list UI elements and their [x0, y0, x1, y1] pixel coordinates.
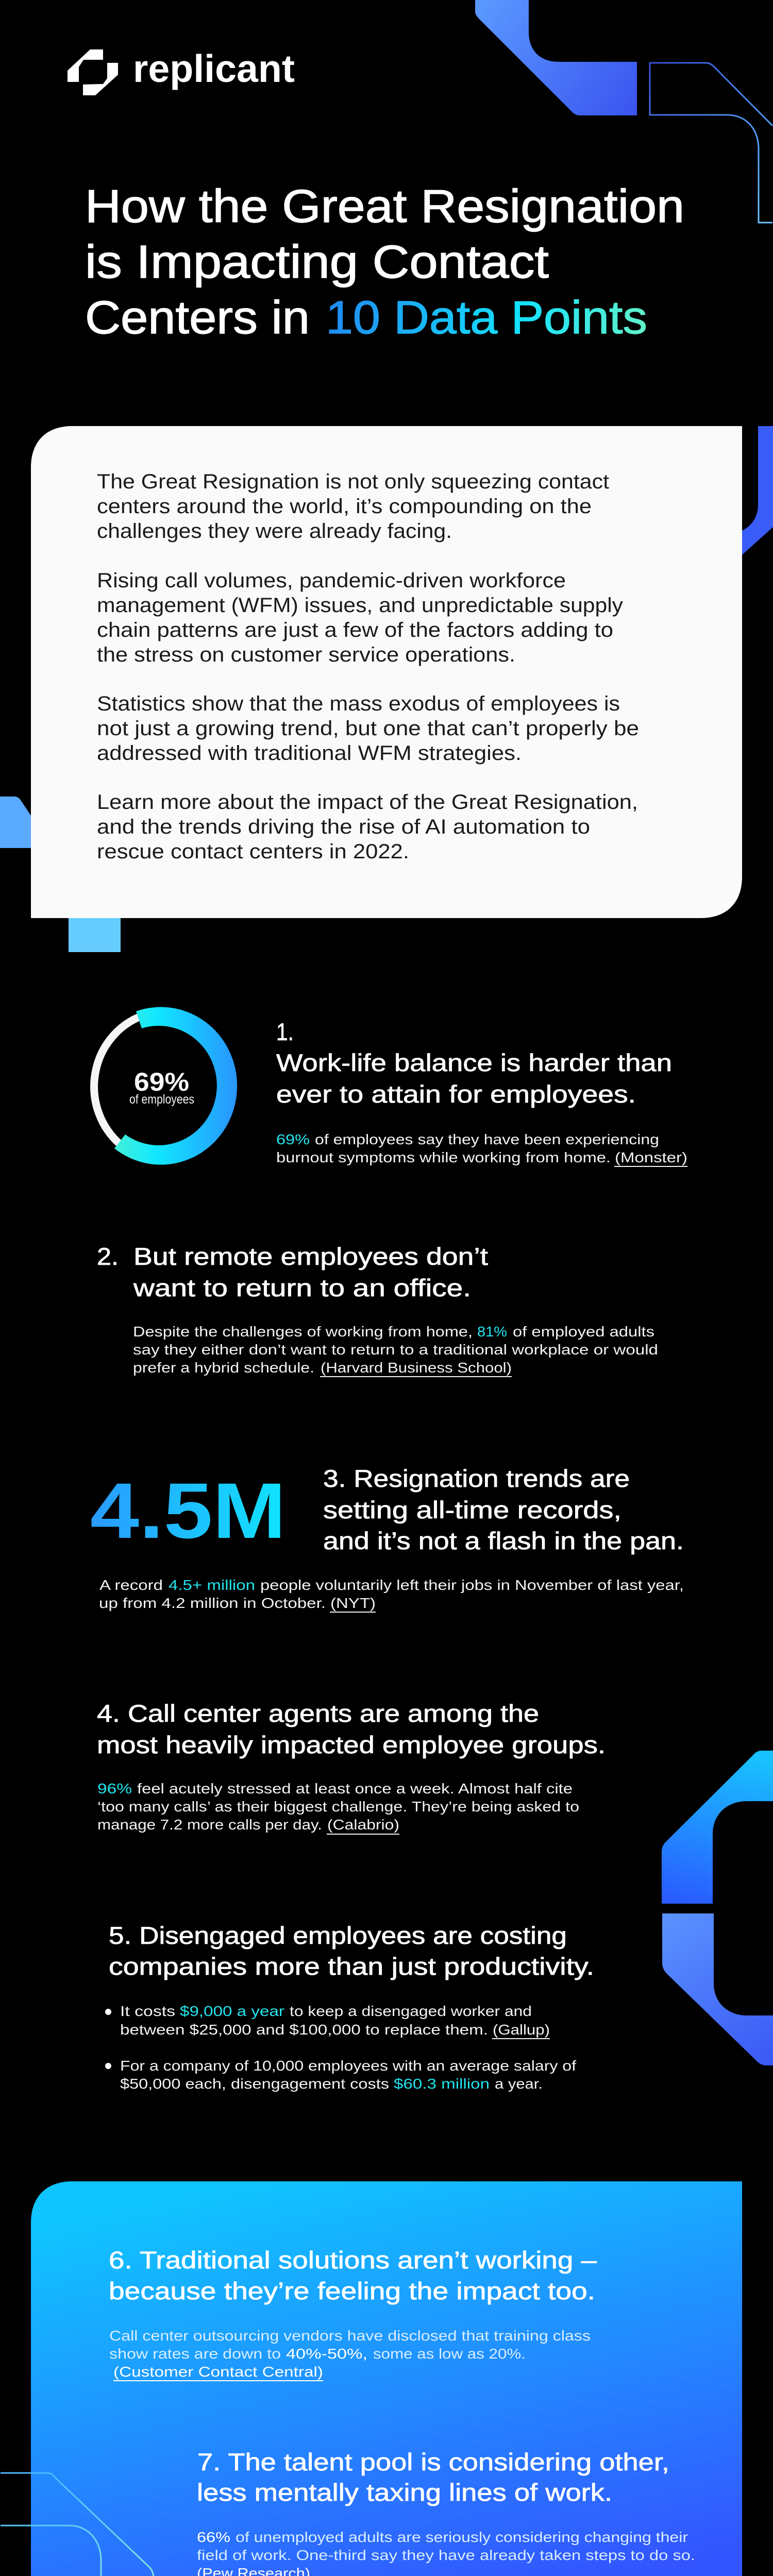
point 5: disengaged employees: $50,000 each, disengagement costs	[120, 2076, 389, 2092]
point 1: work-life balance: ever to attain for employees.	[276, 1080, 636, 1108]
point 5: disengaged employees: (Gallup)	[493, 2022, 550, 2038]
point 5: disengaged employees: 5. Disengaged employees are costing	[109, 1922, 567, 1949]
point 7: talent pool: field of work. One-third say they have already taken steps to do so.	[197, 2547, 695, 2563]
point 1: work-life balance: (Monster)	[615, 1149, 687, 1165]
title: 10 Data Points	[326, 292, 647, 344]
intro text: The Great Resignation is not only squeezing contact	[97, 470, 609, 493]
title: Centers in	[85, 292, 310, 344]
point 5: disengaged employees: to keep a disengaged worker and	[290, 2003, 532, 2019]
point 2: remote employees: 2.	[97, 1243, 119, 1270]
point 4: call center agents: ‘too many calls’ as their biggest challenge. They’re being asked to	[97, 1799, 579, 1815]
point 5: disengaged employees: between $25,000 and $100,000 to replace them.	[120, 2022, 488, 2038]
point 1: work-life balance: of employees say they have been experiencing	[315, 1131, 659, 1147]
intro text: challenges they were already facing.	[97, 520, 452, 543]
point 4: call center agents: (Calabrio)	[327, 1817, 399, 1833]
point 3: resignation trends: up from 4.2 million in October.	[99, 1595, 326, 1611]
point 3: resignation trends: (NYT)	[330, 1595, 376, 1611]
point 7: talent pool: less mentally taxing lines of work.	[197, 2479, 612, 2506]
point 3: resignation trends: setting all-time records,	[323, 1496, 621, 1523]
point 1: work-life balance: burnout symptoms while working from home.	[276, 1149, 611, 1165]
point 4: call center agents: manage 7.2 more calls per day.	[97, 1817, 322, 1833]
point 1: work-life balance	[276, 1018, 687, 1167]
intro text: the stress on customer service operations.	[97, 643, 515, 666]
point 3: resignation trends	[99, 1465, 684, 1613]
intro text	[97, 470, 639, 863]
intro text: rescue contact centers in 2022.	[97, 840, 409, 863]
title: is Impacting Contact	[85, 236, 549, 288]
point 4: call center agents: 96%	[97, 1781, 132, 1797]
intro text: Rising call volumes, pandemic-driven workforce	[97, 569, 566, 592]
intro text: addressed with traditional WFM strategies.	[97, 742, 522, 765]
decorative shape: right upper band	[662, 1751, 773, 1904]
point 5: disengaged employees: $60.3 million	[394, 2076, 490, 2092]
donut chart: 69% of employees: 69%	[134, 1067, 189, 1096]
intro text: Statistics show that the mass exodus of employees is	[97, 692, 620, 715]
point 2: remote employees: 81%	[477, 1324, 507, 1340]
point 6: traditional solutions: 6. Traditional solutions aren’t working –	[109, 2246, 597, 2274]
big stat: 4.5M: 4.5M	[90, 1467, 286, 1555]
point 1: work-life balance: 69%	[276, 1131, 310, 1147]
point 2: remote employees: prefer a hybrid schedule.	[133, 1360, 314, 1376]
intro text: and the trends driving the rise of AI automation to	[97, 816, 590, 838]
point 2: remote employees: Despite the challenges of working from home,	[133, 1324, 473, 1340]
intro text: centers around the world, it’s compounding on the	[97, 495, 592, 518]
point 5: disengaged employees: For a company of 10,000 employees with an average salary of	[120, 2058, 576, 2074]
point 3: resignation trends: 4.5+ million	[169, 1577, 255, 1593]
point 6: traditional solutions	[109, 2246, 597, 2381]
point 6: traditional solutions: some as low as 20%.	[373, 2346, 526, 2362]
point 7: talent pool	[196, 2448, 695, 2576]
decorative shape: right lower band	[662, 1913, 773, 2065]
point 2: remote employees: say they either don’t want to return to a traditional workplace or would	[133, 1342, 658, 1358]
point 5: disengaged employees: $9,000 a year	[180, 2003, 284, 2019]
point 1: work-life balance: 1.	[276, 1018, 294, 1045]
point 7: talent pool: 66%	[197, 2529, 230, 2545]
point 6: traditional solutions: because they’re feeling the impact too.	[109, 2277, 595, 2304]
point 6: traditional solutions: Call center outsourcing vendors have disclosed that training class	[109, 2328, 591, 2344]
point 2: remote employees: of employed adults	[513, 1324, 654, 1340]
point 2: remote employees: But remote employees don’t	[133, 1243, 488, 1270]
title	[85, 181, 684, 344]
point 5: disengaged employees: a year.	[495, 2076, 543, 2092]
intro text: Learn more about the impact of the Great Resignation,	[97, 791, 638, 814]
intro text: chain patterns are just a few of the factors adding to	[97, 619, 613, 641]
point 6: traditional solutions: 40%-50%,	[286, 2346, 367, 2362]
point 6: traditional solutions: (Customer Contact Central)	[113, 2364, 323, 2380]
point 5: disengaged employees	[105, 1922, 594, 2092]
donut chart: 69% of employees	[94, 1007, 237, 1165]
point 7: talent pool: of unemployed adults are seriously considering changing their	[236, 2529, 688, 2545]
decorative shape: right of intro card	[742, 426, 773, 555]
panel: points 6 and 7	[1, 2181, 742, 2576]
point 3: resignation trends: people voluntarily left their jobs in November of last year,	[260, 1577, 684, 1593]
logo: replicant	[68, 47, 295, 95]
point 6: traditional solutions: show rates are down to	[109, 2346, 281, 2362]
point 4: call center agents: feel acutely stressed at least once a week. Almost half cite	[137, 1781, 573, 1797]
title: How the Great Resignation	[85, 181, 684, 232]
point 3: resignation trends: A record	[99, 1577, 163, 1593]
point 7: talent pool: 7. The talent pool is considering other,	[197, 2448, 669, 2476]
point 1: work-life balance: Work-life balance is harder than	[276, 1049, 672, 1076]
decorative shape: top outline	[650, 63, 772, 223]
decorative shape: left of intro card	[0, 796, 31, 848]
point 3: resignation trends: and it’s not a flash in the pan.	[323, 1527, 684, 1554]
intro text: not just a growing trend, but one that can’t properly be	[97, 717, 639, 740]
logo: replicant: replicant	[133, 47, 295, 90]
decorative shape: below intro card	[69, 918, 121, 952]
point 4: call center agents	[97, 1700, 606, 1835]
point 2: remote employees: (Harvard Business School)	[321, 1360, 512, 1376]
decorative shape: top blue band	[475, 0, 637, 115]
point 4: call center agents: 4. Call center agents are among the	[97, 1700, 539, 1727]
panel: intro card	[31, 426, 742, 918]
donut chart: 69% of employees: of employees	[129, 1092, 194, 1107]
intro text: management (WFM) issues, and unpredictable supply	[97, 594, 623, 617]
point 5: disengaged employees: It costs	[120, 2003, 175, 2019]
point 2: remote employees: want to return to an office.	[133, 1274, 471, 1301]
decorative outline in panel	[1, 2473, 154, 2576]
point 5: disengaged employees: companies more than just productivity.	[109, 1953, 594, 1980]
point 2: remote employees	[97, 1243, 658, 1377]
point 3: resignation trends: 3. Resignation trends are	[323, 1465, 630, 1492]
point 4: call center agents: most heavily impacted employee groups.	[97, 1731, 606, 1758]
